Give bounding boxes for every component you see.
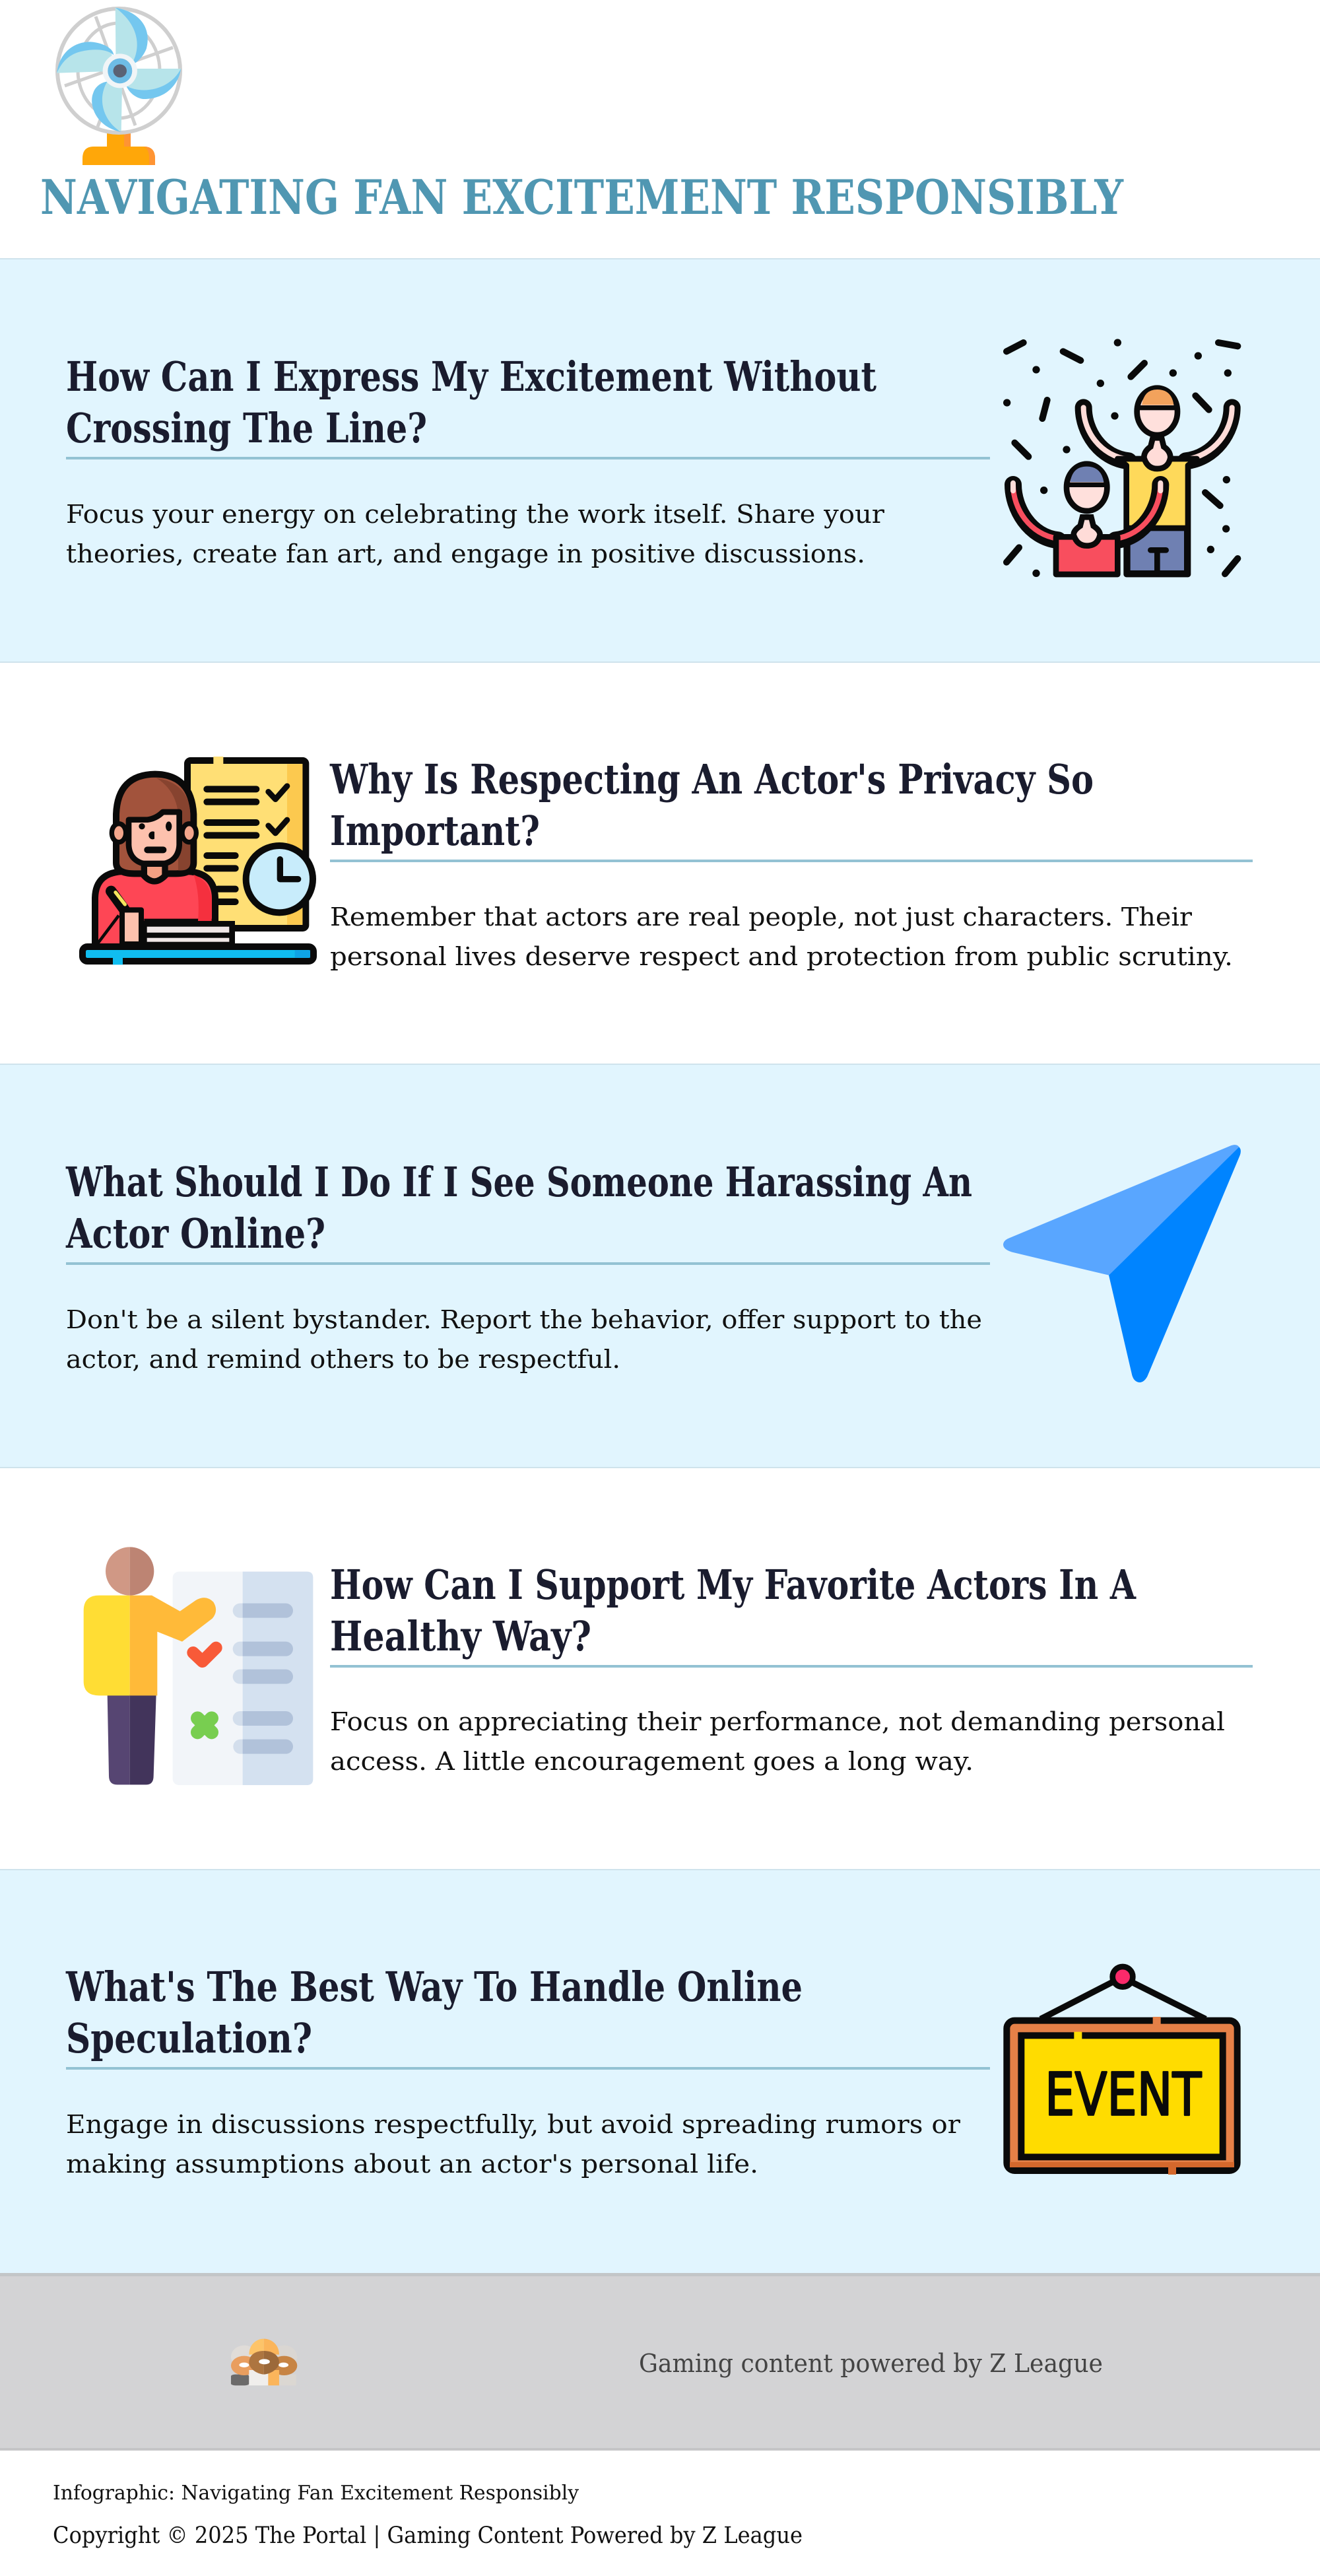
heading: healthy support	[330, 1561, 1253, 1668]
heading: harassment online	[65, 1158, 990, 1265]
heading: healthy support: How Can I Support My Favorite Actors In A	[330, 1561, 1137, 1609]
text block: express excitement	[66, 500, 885, 569]
heading: express excitement: Crossing The Line?	[66, 404, 427, 452]
heading: respecting privacy	[329, 755, 1253, 862]
panel: online speculation	[0, 1869, 1320, 2274]
panel: respecting privacy	[82, 755, 1253, 972]
title: NAVIGATING FAN EXCITEMENT RESPONSIBLY	[40, 169, 1124, 225]
text block: healthy support	[330, 1707, 1225, 1777]
icon: person presenting checklist	[84, 1547, 313, 1785]
panel: express excitement	[0, 258, 1320, 663]
icon: desk fan	[57, 8, 181, 165]
panel: harassment online	[0, 1064, 1320, 1468]
heading: harassment online: What Should I Do If I See Someone Harassing An	[65, 1158, 972, 1206]
text block: respecting privacy: personal lives deserve respect and protection from public scrutiny.	[330, 942, 1233, 972]
heading: healthy support: Healthy Way?	[330, 1612, 591, 1660]
panel: sponsor band	[0, 2273, 1320, 2451]
icon: group of masked fans	[231, 2339, 297, 2385]
panel: healthy support	[84, 1547, 1253, 1785]
icon: celebrating fans with confetti	[1003, 339, 1238, 577]
text block: online speculation	[66, 2110, 961, 2179]
text block: online speculation: Engage in discussions respectfully, but avoid spreading rumors or	[66, 2110, 961, 2140]
text block: respecting privacy	[330, 902, 1233, 972]
footer text: Copyright © 2025 The Portal | Gaming Content Powered by Z League	[53, 2523, 803, 2549]
footer text	[53, 2482, 803, 2549]
heading: respecting privacy: Important?	[330, 807, 540, 855]
heading: respecting privacy: Why Is Respecting An Actor's Privacy So	[329, 755, 1094, 803]
heading: online speculation: What's The Best Way To Handle Online	[65, 1963, 803, 2011]
header	[40, 8, 1124, 225]
heading: harassment online: Actor Online?	[65, 1209, 325, 1258]
heading: online speculation	[65, 1963, 990, 2070]
sponsor text: Gaming content powered by Z League	[639, 2349, 1103, 2378]
heading: express excitement: How Can I Express My Excitement Without	[66, 353, 876, 401]
footer text: Infographic: Navigating Fan Excitement Responsibly	[53, 2482, 579, 2505]
icon: woman with checklist and clock	[82, 757, 314, 965]
text block: respecting privacy: Remember that actors are real people, not just characters. Their	[330, 902, 1193, 932]
text block: harassment online: Don't be a silent bystander. Report the behavior, offer support to the	[66, 1305, 982, 1335]
text block: healthy support: Focus on appreciating their performance, not demanding personal	[330, 1707, 1225, 1737]
heading: express excitement	[66, 353, 990, 459]
text block: harassment online: actor, and remind others to be respectful.	[66, 1345, 620, 1374]
heading: online speculation: Speculation?	[66, 2014, 312, 2062]
text block: online speculation: making assumptions about an actor's personal life.	[66, 2150, 758, 2179]
icon: navigation arrow	[1003, 1145, 1241, 1382]
text block: express excitement: Focus your energy on celebrating the work itself. Share your	[66, 500, 885, 529]
icon: hanging event sign: EVENT	[1045, 2060, 1202, 2129]
text block: healthy support: access. A little encouragement goes a long way.	[330, 1747, 974, 1777]
text block: express excitement: theories, create fan art, and engage in positive discussions.	[66, 539, 865, 569]
text block: harassment online	[66, 1305, 982, 1374]
icon: hanging event sign	[1006, 1967, 1238, 2175]
